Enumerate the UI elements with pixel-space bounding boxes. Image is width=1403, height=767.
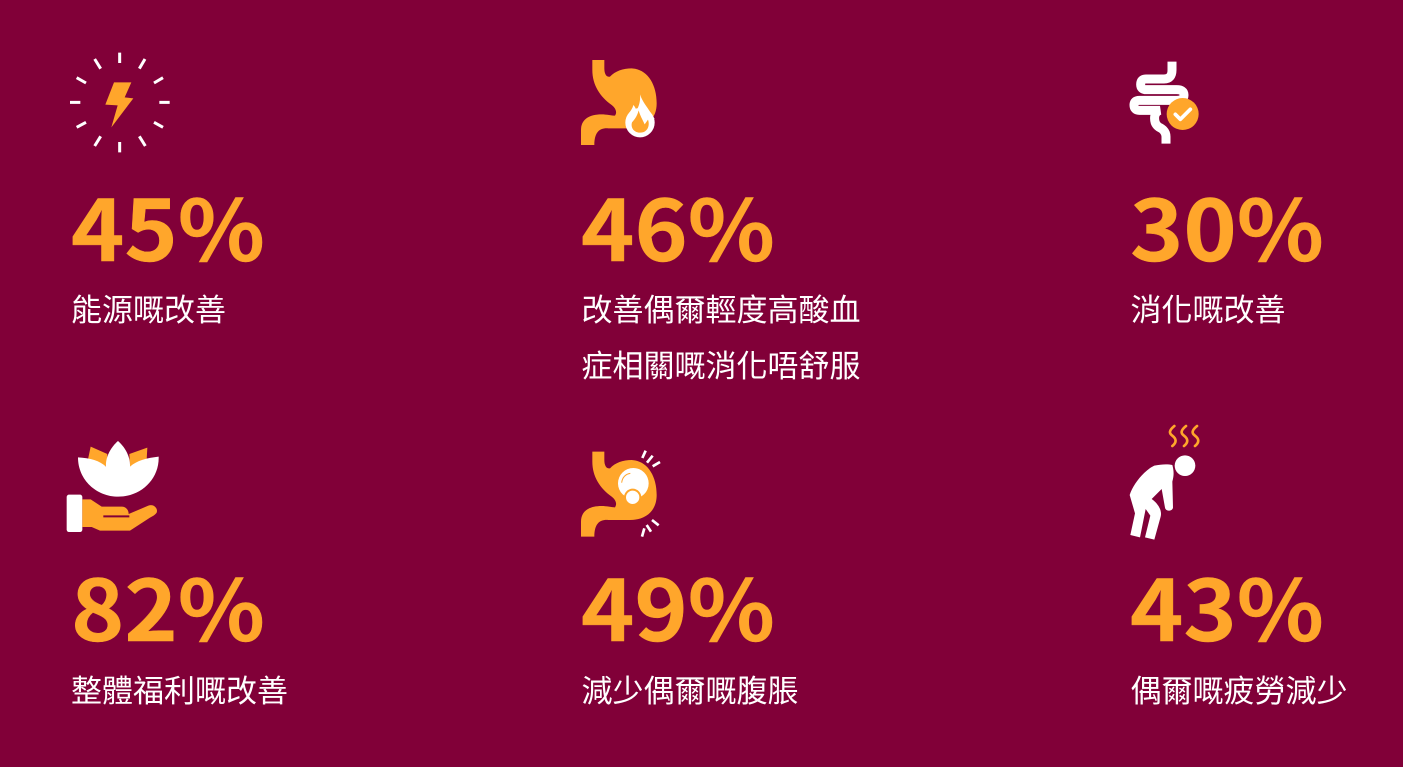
label: overall wellbeing: 整體福利嘅改善 <box>71 666 288 711</box>
icon: fatigued person <box>1130 424 1200 540</box>
stat: 46%: 46% <box>581 164 775 286</box>
label: reflux discomfort: 改善偶爾輕度高酸血 <box>582 285 860 330</box>
stat: 45%: 45% <box>71 164 265 286</box>
icon: energy bolt <box>70 52 170 152</box>
icon: stomach with flame <box>581 60 657 145</box>
label: energy: 能源嘅改善 <box>71 285 226 330</box>
label: reflux discomfort <box>582 285 860 386</box>
stat: 43%: 43% <box>1130 544 1324 666</box>
icon: stomach with bloating <box>581 450 661 537</box>
label: reflux discomfort: 症相關嘅消化唔舒服 <box>582 341 860 386</box>
label: digestion: 消化嘅改善 <box>1130 285 1286 330</box>
stat: 49%: 49% <box>581 544 775 666</box>
icon: lotus on hand <box>66 441 159 532</box>
stat: 82%: 82% <box>71 544 265 666</box>
stat: 30%: 30% <box>1130 164 1324 286</box>
icon: intestine with check <box>1130 62 1199 144</box>
label: bloating: 減少偶爾嘅腹脹 <box>582 666 798 711</box>
label: fatigue: 偶爾嘅疲勞減少 <box>1130 666 1348 711</box>
